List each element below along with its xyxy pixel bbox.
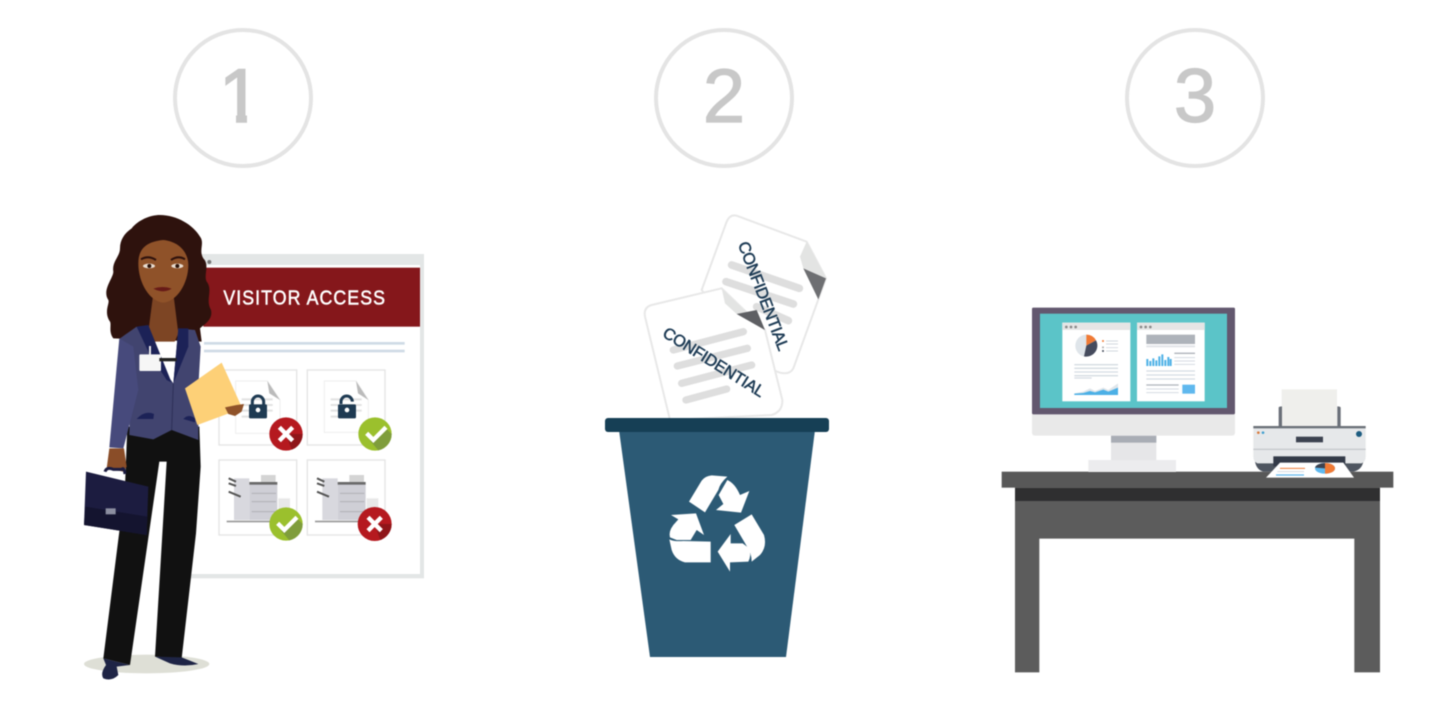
panel: confidential papers and recycling bin	[605, 215, 829, 657]
poster tile: locked document denied	[219, 370, 303, 451]
back paper	[702, 215, 826, 373]
visitor access poster: VISITOR ACCESS	[223, 288, 385, 310]
step 2 number badge: 2	[703, 54, 745, 139]
confidential papers	[645, 215, 826, 420]
poster tile: unlocked document approved	[307, 370, 392, 451]
back paper: CONFIDENTIAL	[734, 239, 792, 353]
poster tile: copier approved	[219, 460, 303, 541]
icon: recycling symbol	[669, 475, 765, 572]
computer monitor	[1032, 308, 1235, 472]
step 2 number badge	[656, 30, 792, 166]
screen window: pie chart report	[1062, 323, 1130, 401]
visitor access poster	[187, 254, 424, 578]
step 3 number badge	[1127, 30, 1263, 166]
recycling bin	[605, 418, 829, 657]
desk	[1002, 472, 1393, 672]
front paper	[645, 288, 782, 420]
poster tile: copier denied	[307, 460, 392, 541]
printer	[1253, 389, 1366, 478]
step 1 number badge: 1	[219, 54, 261, 139]
front paper: CONFIDENTIAL	[659, 324, 768, 401]
screen window: bar chart report	[1137, 323, 1205, 401]
step 1 number badge	[175, 30, 311, 166]
panel: visitor access scene	[84, 215, 424, 679]
woman with briefcase and folder	[84, 215, 244, 679]
panel: desk with computer and printer	[1002, 308, 1393, 672]
step 3 number badge: 3	[1174, 54, 1216, 139]
